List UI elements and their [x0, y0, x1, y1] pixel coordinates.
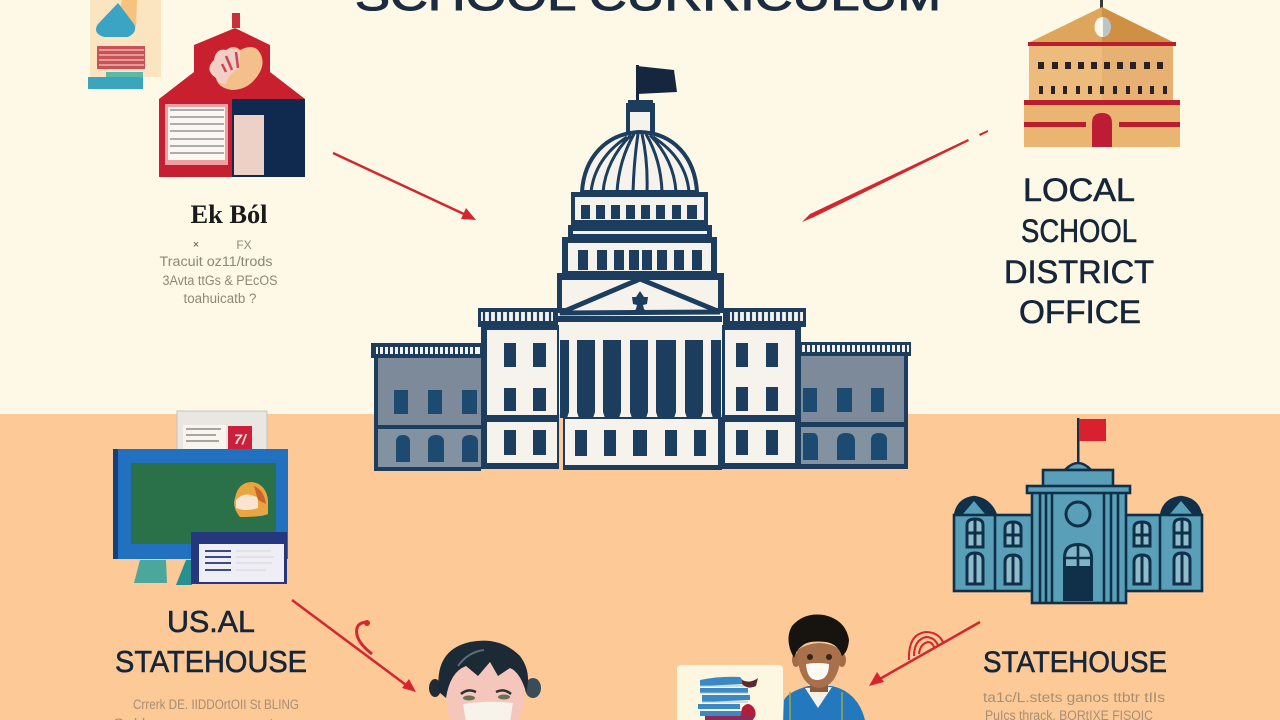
lantern [626, 103, 655, 133]
arrow: lower left with curl [292, 600, 416, 692]
heading: us.al statehouse [115, 604, 307, 679]
arrow: top right to capitol [802, 130, 988, 222]
icon: red school house [159, 13, 305, 177]
heading: local school district office: LOCAL [1023, 172, 1135, 208]
text block: left upper description: toahuicatb ? [184, 291, 256, 306]
outer right wing [801, 342, 911, 469]
dome [582, 132, 697, 192]
text block: left upper description: × [193, 239, 199, 251]
outer left wing [371, 343, 481, 471]
text block: right lower description [983, 690, 1165, 720]
heading: local school district office: DISTRICT [1004, 254, 1154, 290]
illustration: book stack card [677, 665, 783, 720]
lower drum [562, 237, 717, 275]
heading: statehouse: STATEHOUSE [983, 646, 1167, 679]
text block: left lower description [113, 697, 299, 720]
text block: left upper description: Tracuit oz11/trods [160, 254, 273, 269]
illustration: smiling student [783, 614, 866, 720]
icon: local school district office [1024, 0, 1180, 147]
arrow: lower right with arcs [869, 622, 980, 686]
background: peach lower area [0, 414, 1280, 720]
icon: computer with chalkboard screen: 7/ [234, 431, 248, 447]
text block: left upper description: FX [236, 238, 252, 252]
text block: left lower description: Crrerk DE. IIDDOrtOII St BLING [133, 697, 299, 712]
inner right wing [722, 308, 806, 469]
icon: small document collage [88, 0, 161, 89]
flag [628, 65, 677, 103]
heading: local school district office: OFFICE [1019, 294, 1141, 330]
heading: us.al statehouse: US.AL [167, 604, 255, 639]
text block: left upper description: 3Avta ttGs & PEcOS [162, 273, 278, 288]
heading: local school district office: SCHOOL [1021, 213, 1137, 249]
heading: local school district office [1004, 172, 1154, 330]
central portico with pediment [557, 273, 724, 470]
arrow: top left to capitol [333, 153, 476, 220]
heading: us.al statehouse: STATEHOUSE [115, 644, 307, 679]
inner left wing [478, 308, 559, 469]
background: cream upper area [0, 0, 1280, 414]
icon: capitol building [371, 65, 911, 471]
illustration: student with mask [429, 641, 541, 720]
upper drum [568, 192, 712, 237]
label: left upper heading: Ek Ból [190, 200, 268, 229]
text block: left upper description [160, 238, 278, 306]
icon: computer with chalkboard screen [113, 411, 288, 585]
text block: right lower description: ta1c/L.stets ganos ttbtr tIIs [983, 690, 1165, 705]
icon: teal statehouse [954, 418, 1202, 603]
